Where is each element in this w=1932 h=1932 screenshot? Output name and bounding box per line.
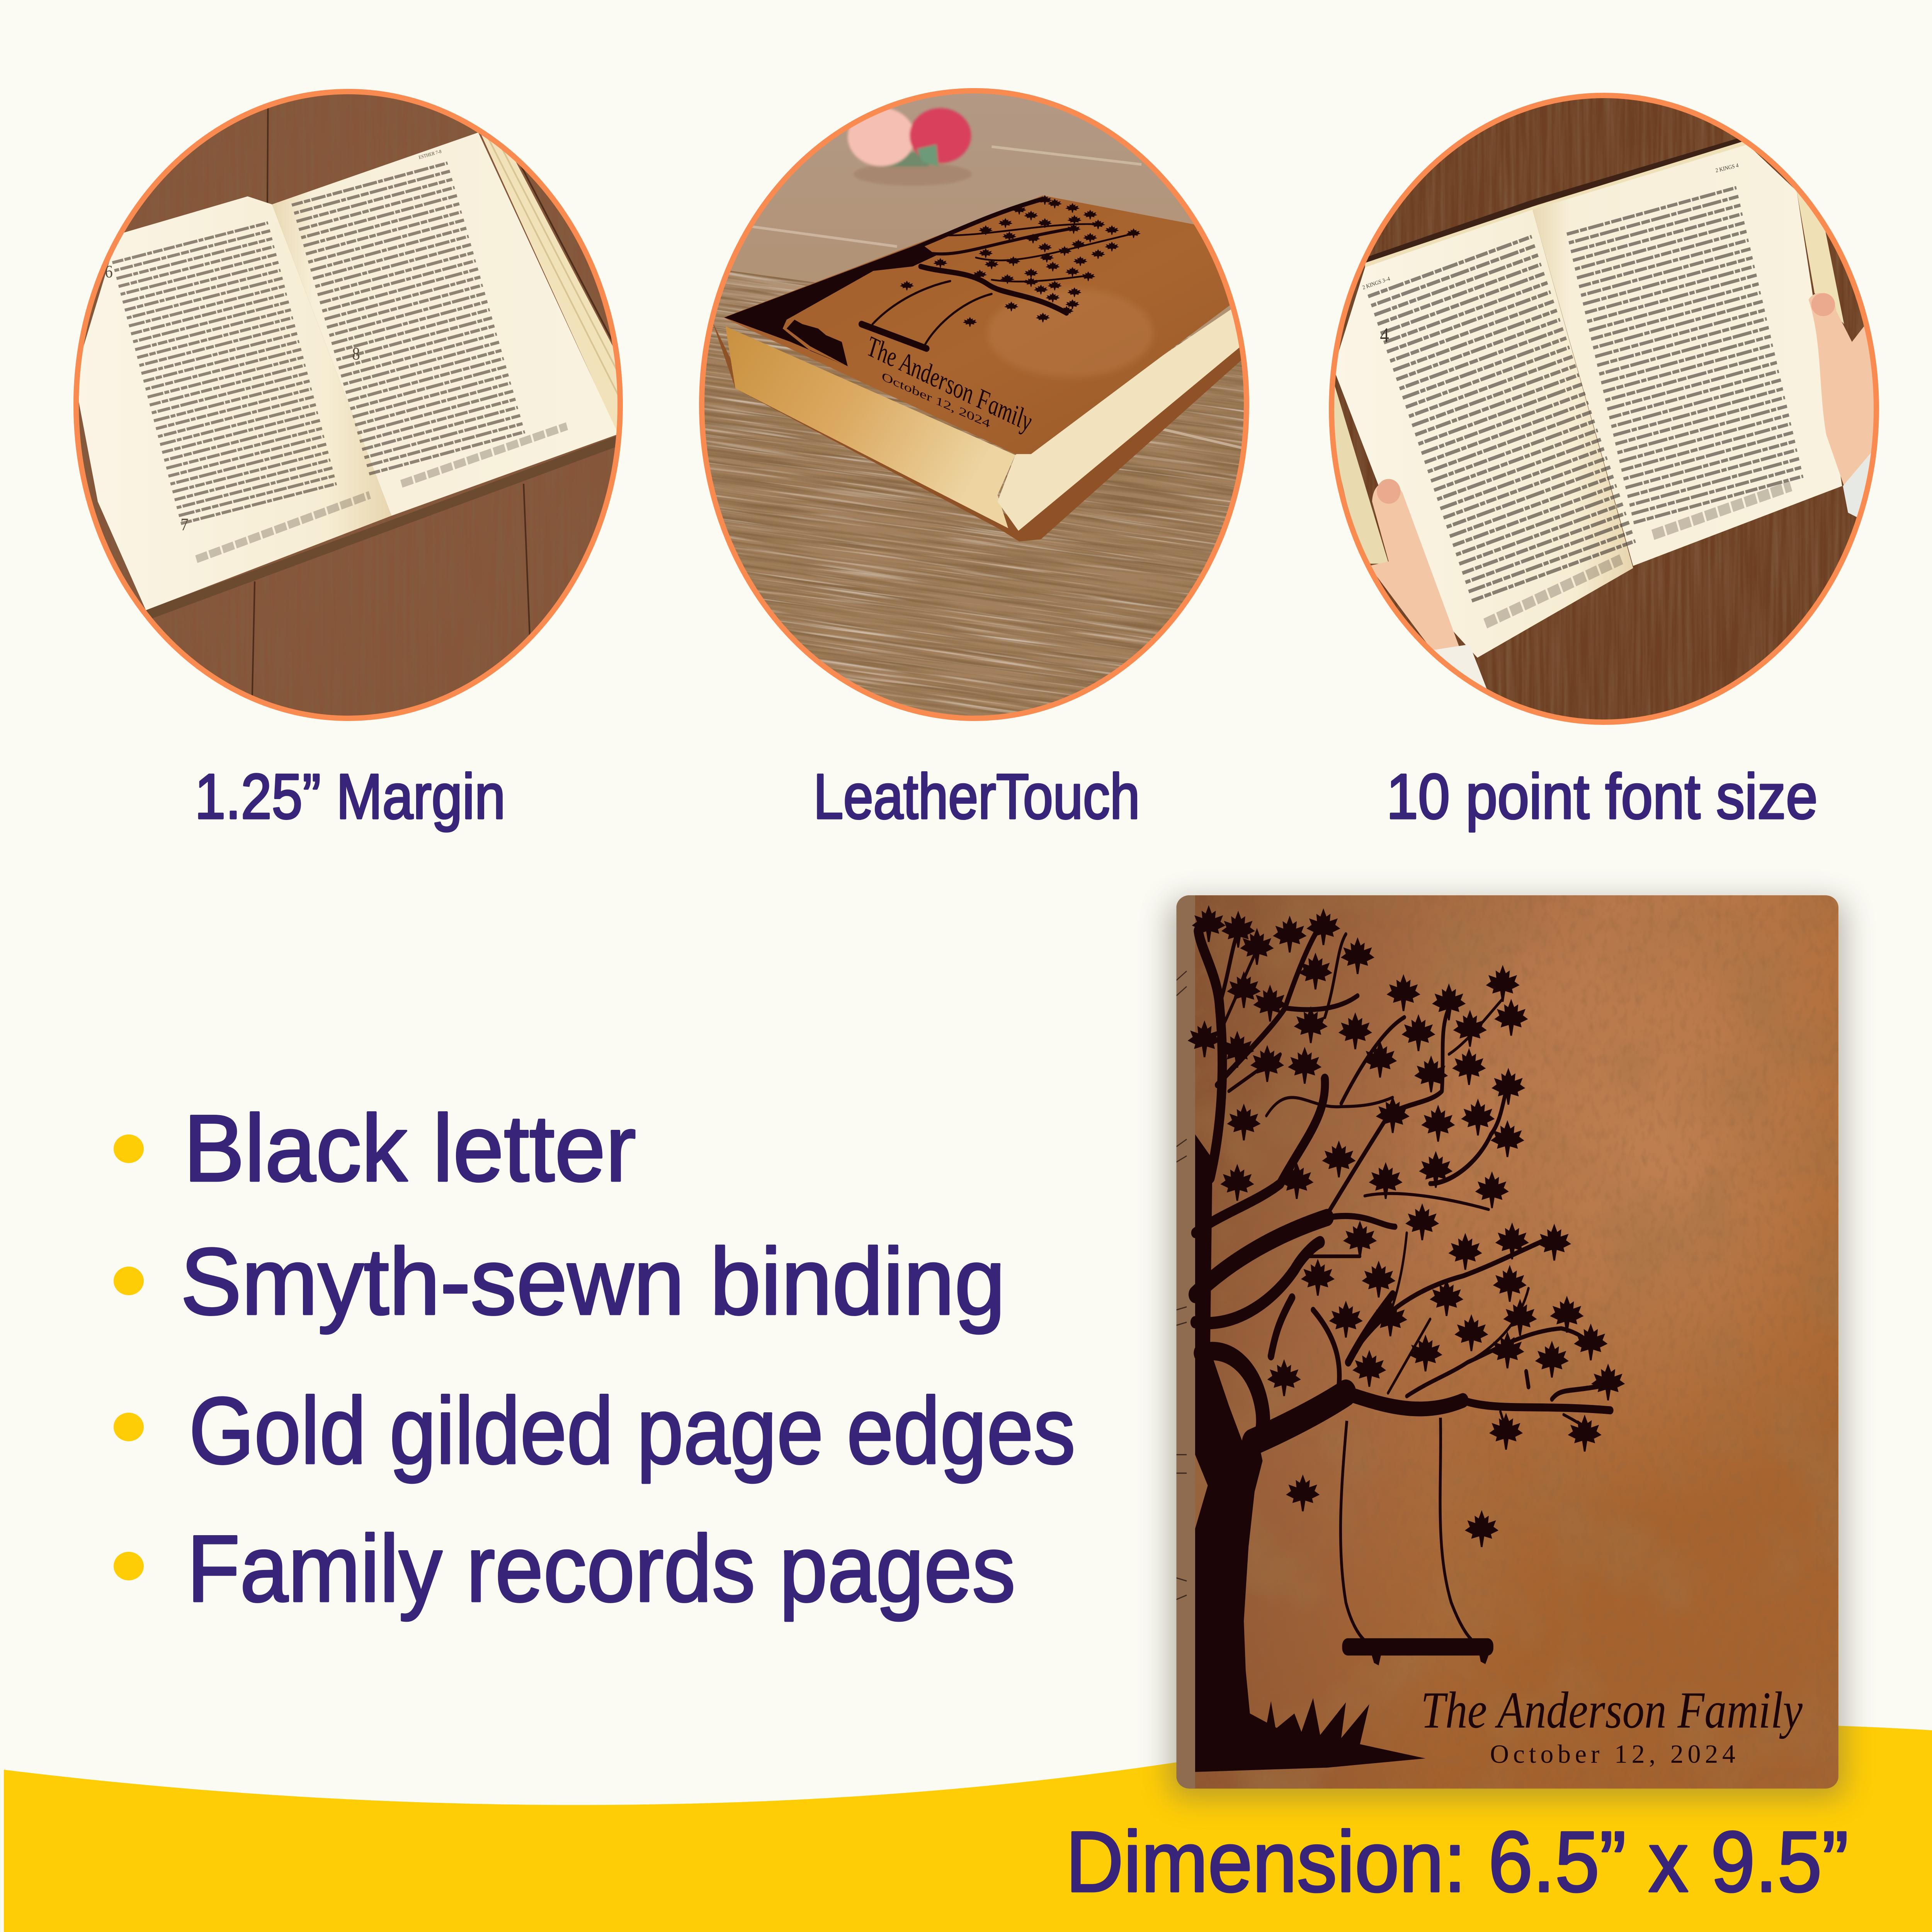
bullet 4	[114, 1552, 144, 1580]
top-edge pages	[998, 309, 1241, 531]
feature list	[114, 1095, 1075, 1621]
page headers and chapter number: 2 KINGS 4	[1715, 162, 1739, 174]
dark table seam	[1365, 138, 1743, 264]
right page	[1532, 145, 1842, 566]
bottom cover	[713, 322, 1242, 541]
bullet 2	[114, 1267, 144, 1295]
trunk	[1195, 1134, 1425, 1772]
engraved family name: The Anderson Family	[1421, 1682, 1803, 1739]
page headers and chapter number: 4	[1380, 323, 1389, 346]
swing seat	[862, 324, 927, 349]
dimension label: Dimension: 6.5” x 9.5”	[1066, 1814, 1849, 1910]
spine	[1177, 895, 1195, 1789]
swing	[1340, 1418, 1493, 1665]
engraved date: October 12, 2024	[881, 370, 991, 431]
grass	[787, 320, 848, 366]
engraved date: October 12, 2024	[1490, 1739, 1735, 1769]
left page	[74, 196, 391, 610]
book shadow	[1169, 900, 1845, 1799]
right hand	[1809, 293, 1881, 486]
page headers and chapter numbers: 7	[180, 515, 189, 534]
yellow wave band	[4, 1724, 1932, 1932]
outline: first photo ring	[76, 92, 620, 718]
fore edge of right pages	[480, 133, 622, 435]
page block left	[1326, 369, 1389, 564]
book cover edge	[145, 435, 619, 619]
page headers and chapter numbers: 8	[352, 344, 360, 364]
leaves	[900, 195, 1141, 327]
caption: font size: 10 point font size	[1386, 761, 1818, 832]
right page	[272, 133, 618, 516]
bullet 1	[114, 1134, 144, 1163]
page headers and chapter number: 2 KINGS 3–4	[1362, 276, 1391, 291]
left page	[1333, 210, 1633, 658]
leaves	[1192, 905, 1226, 942]
panel: reading photo with hands	[1321, 80, 1889, 736]
text lines	[1368, 188, 1803, 601]
text lines	[112, 163, 525, 524]
page headers and chapter number	[1362, 162, 1739, 346]
left hand	[1369, 482, 1460, 650]
page headers and chapter numbers	[105, 148, 442, 534]
page headers and chapter numbers: ESTHER 7-8	[418, 148, 442, 160]
branches	[872, 199, 1129, 349]
panel: leather bible cover	[1177, 895, 1838, 1789]
gilded page block	[726, 327, 1015, 528]
panel: open bible margin photo	[79, 94, 617, 716]
feature: black letter: Black letter	[184, 1095, 636, 1201]
caption: margin: 1.25” Margin	[195, 761, 505, 832]
top block edge	[1365, 140, 1750, 269]
feature: binding: Smyth-sewn binding	[180, 1228, 1005, 1334]
icon: paper roses	[848, 108, 972, 186]
branches	[1195, 926, 1611, 1442]
grass and flowers	[1250, 1698, 1425, 1763]
cover engraving: trunk	[724, 243, 936, 366]
cover top	[723, 196, 1231, 454]
page headers and chapter numbers: 6	[105, 262, 113, 282]
sleeves	[1432, 645, 1487, 690]
caption: leather: LeatherTouch	[813, 761, 1140, 832]
engraved family name: The Anderson Family	[865, 329, 1034, 439]
fore edge right	[1797, 187, 1844, 324]
feature: page edges: Gold gilded page edges	[189, 1378, 1075, 1483]
feature: family records: Family records pages	[187, 1515, 1015, 1621]
panel: leather cover photo	[607, 76, 1365, 843]
footnotes	[196, 426, 567, 559]
outline: third photo ring	[1332, 95, 1876, 722]
bullet 3	[114, 1413, 144, 1441]
outline: second photo ring	[702, 91, 1247, 718]
footnotes	[1485, 486, 1791, 624]
tree silhouette	[1188, 905, 1625, 1772]
